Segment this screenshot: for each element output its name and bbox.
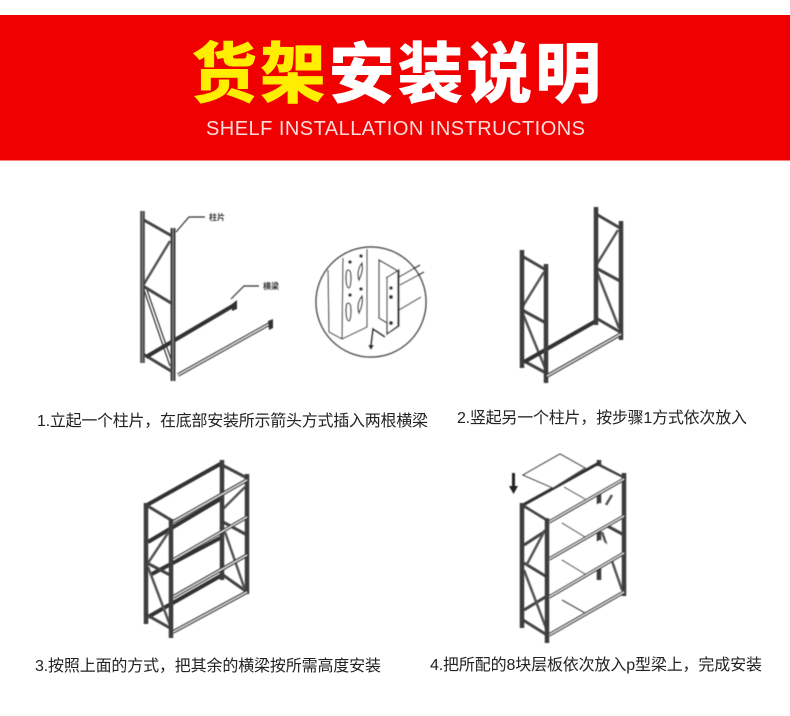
caption 4: 4.把所配的8块层板依次放入p型梁上，完成安装: [430, 656, 762, 674]
panel seams: [562, 487, 585, 613]
arrow: panel drop: [509, 473, 518, 494]
figure 1: upright frame with two beams: [142, 211, 279, 381]
caption 1: 1.立起一个柱片，在底部安装所示箭头方式插入两根横梁: [37, 411, 428, 430]
caption 3: 3.按照上面的方式，把其余的横梁按所需高度安装: [35, 656, 381, 675]
label: beam: [231, 281, 279, 299]
figure 1 detail: beam insertion circle: [316, 247, 426, 357]
label: upright: [176, 212, 225, 232]
figure 3: frame with all beams: [146, 460, 247, 638]
arrow: insertion direction: [371, 329, 385, 345]
shelf panels: [525, 466, 624, 597]
figure 4: shelf with panels: [509, 454, 624, 643]
header banner: [0, 15, 790, 160]
subtitle: SHELF INSTALLATION INSTRUCTIONS: [206, 118, 585, 140]
label: upright: 柱片: [209, 212, 225, 222]
figure 2: two upright frames: [522, 207, 621, 383]
label: beam: 横梁: [263, 281, 279, 291]
caption 2: 2.竖起另一个柱片，按步骤1方式依次放入: [457, 409, 747, 427]
floating panel: [523, 454, 585, 488]
title: 货架安装说明: [191, 21, 601, 117]
